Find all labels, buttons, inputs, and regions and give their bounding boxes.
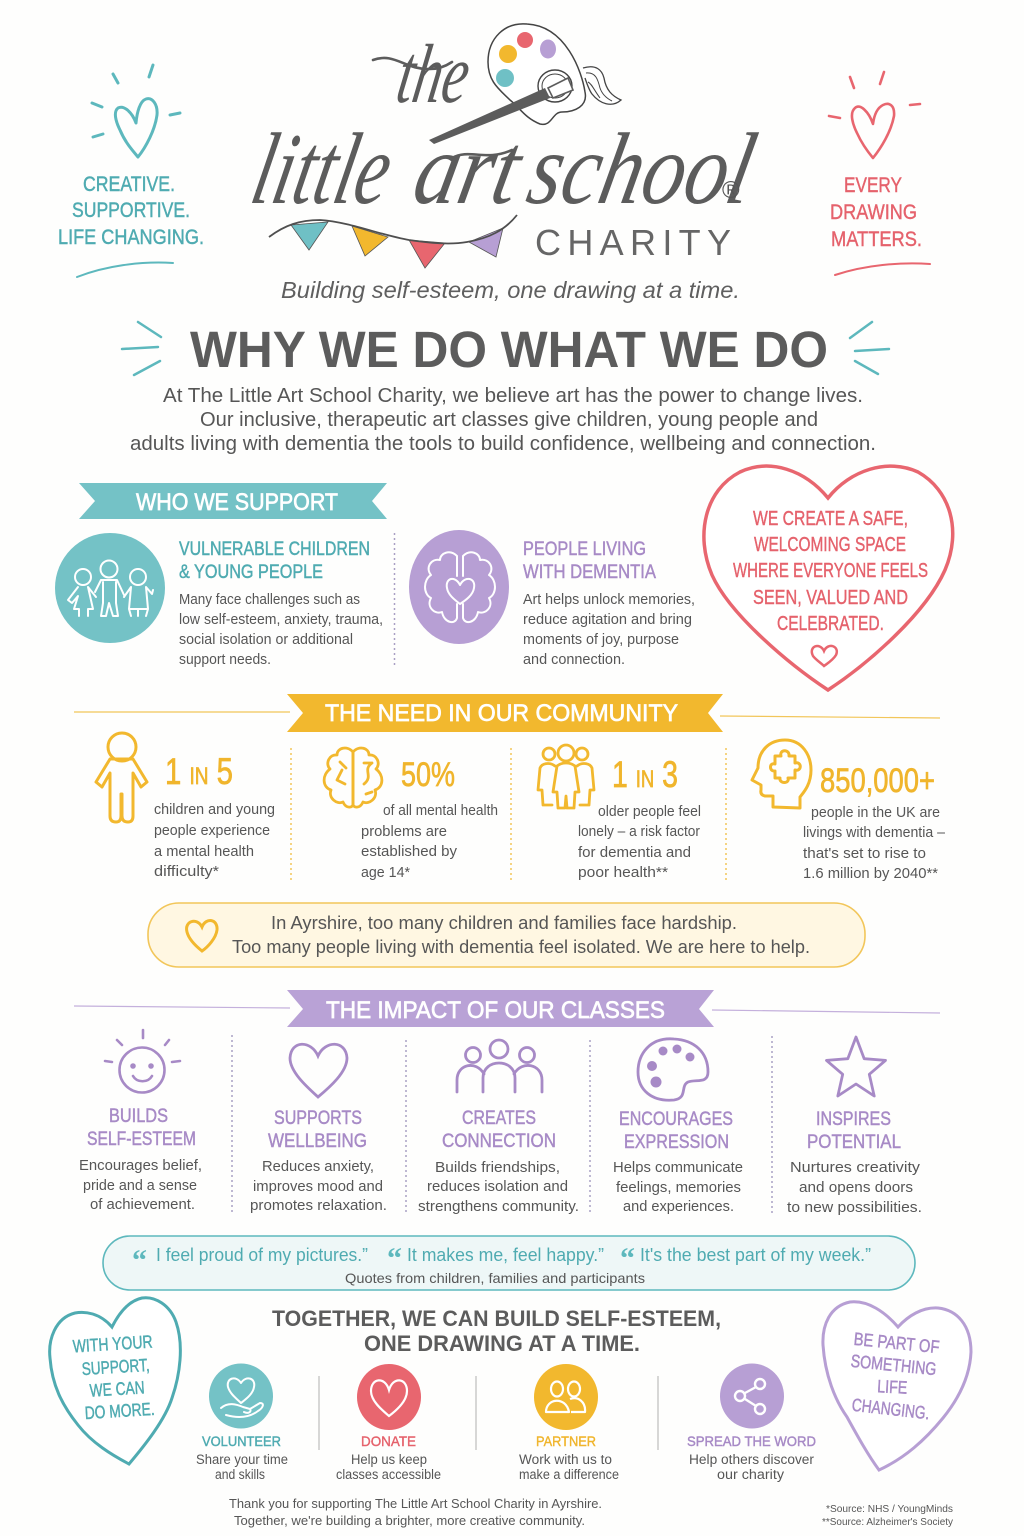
column: creates connection: CREATES (462, 1108, 536, 1129)
sources: *Source: NHS / YoungMinds (826, 1504, 953, 1515)
column: inspires potential: Nurtures creativity (790, 1159, 921, 1176)
banner: the impact (287, 990, 714, 1027)
stat: 1 in 5: a mental health (154, 843, 254, 860)
stat: 50%: established by (361, 843, 457, 860)
column: inspires potential (787, 1037, 922, 1216)
action: donate: DONATE (361, 1433, 416, 1449)
callout heart: be part of something: BE PART OF (853, 1329, 940, 1357)
callout heart: with your support: WITH YOUR (72, 1332, 153, 1356)
callout heart: safe welcoming space (704, 466, 953, 690)
logo wordmark: little (243, 113, 402, 226)
heading: together: TOGETHER, WE CAN BUILD SELF-ESTEEM, (272, 1306, 721, 1331)
action: partner (519, 1364, 619, 1482)
action: partner: make a difference (519, 1467, 619, 1482)
callout heart: safe welcoming space: SEEN, VALUED AND (753, 587, 908, 609)
callout heart: safe welcoming space: CELEBRATED. (777, 613, 884, 635)
stat: 1 in 3: lonely – a risk factor (578, 823, 700, 840)
stat: 1 in 3 (538, 745, 701, 881)
action: spread the word: Help others discover (689, 1452, 815, 1467)
action: spread the word (687, 1364, 816, 1482)
banner: who we support (79, 483, 387, 519)
text: vulnerable children: VULNERABLE CHILDREN (179, 539, 370, 560)
callout: quotes: Quotes from children, families and participants (345, 1270, 645, 1286)
text: people living with dementia: WITH DEMENTIA (523, 562, 656, 583)
heading: together (272, 1306, 721, 1356)
callout heart: with your support: SUPPORT, (81, 1355, 150, 1379)
sources (822, 1504, 953, 1528)
icon: heart (290, 1044, 347, 1097)
stat: 50% (324, 748, 498, 881)
action: donate (336, 1364, 441, 1482)
icon: child (96, 733, 147, 822)
stat: 50%: of all mental health (383, 802, 498, 819)
icon: teal heart with rays (92, 65, 180, 157)
tagline: Building self-esteem, one drawing at a time. (281, 277, 740, 303)
footer thanks: Together, we're building a brighter, more creative community. (234, 1513, 585, 1528)
stat: 850,000+: 1.6 million by 2040** (803, 865, 938, 882)
column: builds self-esteem: of achievement. (90, 1196, 195, 1213)
icon: hand holding heart (209, 1364, 273, 1428)
stat: 1 in 5: people experience (154, 822, 270, 839)
bunting (269, 215, 517, 268)
stat: 1 in 3: older people feel (598, 803, 701, 820)
panel: the impact of our classes (79, 990, 922, 1216)
action: volunteer: Share your time (196, 1452, 288, 1467)
banner: the need (287, 694, 723, 732)
column: builds self-esteem: Encourages belief, (79, 1157, 202, 1174)
column: creates connection: CONNECTION (442, 1131, 556, 1152)
callout: quotes: I feel proud of my pictures.” (156, 1245, 368, 1265)
heading text: WHY WE DO WHAT WE DO (190, 321, 828, 378)
icon: brain (324, 748, 382, 807)
stat: 1 in 3: poor health** (578, 864, 668, 881)
callout heart: with your support (50, 1298, 180, 1464)
text: vulnerable children: & YOUNG PEOPLE (179, 562, 323, 583)
logo wordmark: school (519, 113, 765, 226)
callout heart: safe welcoming space: WHERE EVERYONE FEELS (733, 560, 928, 582)
column: encourages expression: and experiences. (623, 1198, 734, 1215)
icon: red heart with rays (829, 72, 920, 158)
action: donate: classes accessible (336, 1467, 441, 1482)
callout: ayrshire hardship (148, 903, 865, 967)
stat: 50%: 50% (401, 756, 455, 794)
icon: brain with heart in purple circle (409, 530, 509, 644)
callout: quotes: “ (620, 1242, 635, 1275)
column: inspires potential: POTENTIAL (807, 1132, 901, 1153)
panel: the need in our community (96, 694, 946, 883)
action: donate: Help us keep (351, 1452, 427, 1467)
stat: 50%: problems are (361, 823, 447, 840)
action: volunteer: and skills (215, 1467, 265, 1482)
icon: smiling sun (105, 1030, 180, 1092)
action: partner: Work with us to (519, 1452, 612, 1467)
column: inspires potential: to new possibilities. (787, 1199, 922, 1216)
action: volunteer: VOLUNTEER (202, 1433, 281, 1449)
callout heart: be part of something: LIFE (877, 1376, 908, 1398)
stat: 850,000+: 850,000+ (820, 762, 935, 800)
icon: palette (638, 1039, 708, 1100)
banner: who we support: WHO WE SUPPORT (136, 489, 338, 516)
text: vulnerable children: low self-esteem, anxiety, trauma, (179, 611, 383, 628)
column: supports wellbeing: Reduces anxiety, (262, 1158, 374, 1175)
slogan text: MATTERS. (831, 228, 922, 251)
icon: group of people (538, 745, 594, 808)
callout heart: with your support: WE CAN (89, 1377, 145, 1401)
column: supports wellbeing: WELLBEING (268, 1131, 367, 1152)
callout: quotes: “ (132, 1244, 147, 1277)
footer thanks (229, 1496, 602, 1528)
text: vulnerable children: support needs. (179, 651, 271, 668)
callout: quotes: It makes me, feel happy.” (407, 1245, 604, 1265)
text: people living with dementia: Art helps unlock memories, (523, 591, 695, 608)
stat: 1 in 5: children and young (154, 801, 275, 818)
slogan text: EVERY (844, 174, 902, 197)
icon: share in purple circle (720, 1364, 784, 1428)
column: inspires potential: INSPIRES (816, 1109, 891, 1130)
panel: call to action (196, 1364, 816, 1482)
text: people living with dementia: reduce agitation and bring (523, 611, 692, 628)
icon: yellow heart (187, 921, 217, 951)
intro paragraph: At The Little Art School Charity, we believe art has the power to change lives. (163, 385, 863, 407)
column: encourages expression (613, 1039, 743, 1215)
column: encourages expression: feelings, memories (616, 1179, 741, 1196)
footer thanks: Thank you for supporting The Little Art School Charity in Ayrshire. (229, 1496, 602, 1511)
stat: 50%: age 14* (361, 864, 410, 881)
column: builds self-esteem: SELF-ESTEEM (87, 1129, 196, 1150)
icon: head with puzzle piece (752, 740, 811, 808)
callout heart: be part of something: SOMETHING (850, 1351, 937, 1379)
column: encourages expression: EXPRESSION (624, 1132, 729, 1153)
column: creates connection: Builds friendships, (435, 1159, 560, 1176)
logo: the little art school charity (243, 24, 765, 268)
stat: 1 in 5: 1 IN 5 (165, 751, 233, 792)
callout: ayrshire hardship: In Ayrshire, too many children and families face hardship. (271, 913, 737, 933)
intro paragraph: adults living with dementia the tools to build confidence, wellbeing and connection. (130, 433, 876, 455)
slogan text: CREATIVE. (83, 173, 175, 196)
text: vulnerable children: social isolation or additional (179, 631, 353, 648)
column: creates connection (418, 1040, 579, 1215)
column: builds self-esteem (79, 1030, 202, 1213)
callout: quotes: “ (387, 1242, 402, 1275)
slogan text: DRAWING (830, 201, 917, 224)
slogan text: SUPPORTIVE. (72, 199, 190, 222)
panel: who we support (55, 483, 695, 668)
text: people living with dementia: and connection. (523, 651, 625, 668)
column: encourages expression: ENCOURAGES (619, 1109, 733, 1130)
icon: children in teal circle (55, 533, 165, 643)
logo wordmark: ® (722, 177, 740, 204)
text: people living with dementia: moments of joy, purpose (523, 631, 679, 648)
intro paragraph: Our inclusive, therapeutic art classes give children, young people and (200, 409, 818, 431)
column: creates connection: strengthens community. (418, 1198, 579, 1215)
callout heart: safe welcoming space: WELCOMING SPACE (754, 534, 906, 556)
logo wordmark (243, 29, 765, 226)
column: supports wellbeing: SUPPORTS (274, 1108, 362, 1129)
callout: quotes (103, 1236, 915, 1290)
intro paragraph (130, 385, 876, 455)
stat: 850,000+: livings with dementia – (803, 824, 946, 841)
slogan text: LIFE CHANGING. (58, 226, 204, 249)
slogan text (58, 173, 204, 249)
logo wordmark: art (405, 113, 533, 226)
callout heart: be part of something: CHANGING. (851, 1395, 931, 1423)
callout: every drawing matters (829, 72, 930, 275)
logo wordmark: the (391, 29, 477, 121)
banner: the impact: THE IMPACT OF OUR CLASSES (326, 997, 665, 1024)
action: volunteer (196, 1364, 288, 1482)
callout heart: be part of something (823, 1302, 971, 1470)
stat: 1 in 5: difficulty* (154, 863, 219, 880)
column: supports wellbeing: improves mood and (253, 1178, 383, 1195)
stat: 850,000+: people in the UK are (811, 804, 940, 821)
action: partner: PARTNER (536, 1433, 596, 1449)
icon: star (826, 1037, 886, 1096)
text: vulnerable children: Many face challenges such as (179, 591, 360, 608)
text: people living with dementia (523, 539, 695, 668)
stat: 850,000+: that's set to rise to (803, 845, 926, 862)
column: supports wellbeing: promotes relaxation. (250, 1197, 387, 1214)
text: vulnerable children (179, 539, 383, 668)
charity wordmark: CHARITY (535, 222, 731, 263)
icon: palette and brush (429, 24, 621, 144)
callout heart: safe welcoming space: WE CREATE A SAFE, (753, 508, 908, 530)
icon: two people in yellow circle (534, 1364, 598, 1430)
column: inspires potential: and opens doors (799, 1179, 913, 1196)
callout: ayrshire hardship: Too many people living with dementia feel isolated. We are here to help. (232, 937, 810, 957)
callout: creative supportive life changing (58, 65, 204, 277)
banner: the need: THE NEED IN OUR COMMUNITY (325, 700, 678, 727)
heading: together: ONE DRAWING AT A TIME. (364, 1331, 640, 1356)
title: why we do what we do (122, 321, 889, 378)
stat: 1 in 3: for dementia and (578, 844, 691, 861)
column: builds self-esteem: BUILDS (109, 1106, 168, 1127)
column: creates connection: reduces isolation and (427, 1178, 568, 1195)
icon: heart in red circle (357, 1364, 421, 1430)
icon: three people (457, 1040, 542, 1092)
callout heart: with your support: DO MORE. (84, 1399, 155, 1423)
column: builds self-esteem: pride and a sense (83, 1177, 197, 1194)
sources: **Source: Alzheimer's Society (822, 1517, 953, 1528)
action: spread the word: SPREAD THE WORD (687, 1433, 816, 1449)
text: people living with dementia: PEOPLE LIVING (523, 539, 646, 560)
slogan text (830, 174, 922, 251)
stat: 1 in 5 (96, 733, 275, 880)
stat: 850,000+ (752, 740, 946, 882)
action: spread the word: our charity (717, 1467, 784, 1482)
column: supports wellbeing (250, 1044, 387, 1214)
stat: 1 in 3: 1 IN 3 (612, 754, 678, 795)
column: encourages expression: Helps communicate (613, 1159, 743, 1176)
callout: quotes: It's the best part of my week.” (640, 1245, 871, 1265)
